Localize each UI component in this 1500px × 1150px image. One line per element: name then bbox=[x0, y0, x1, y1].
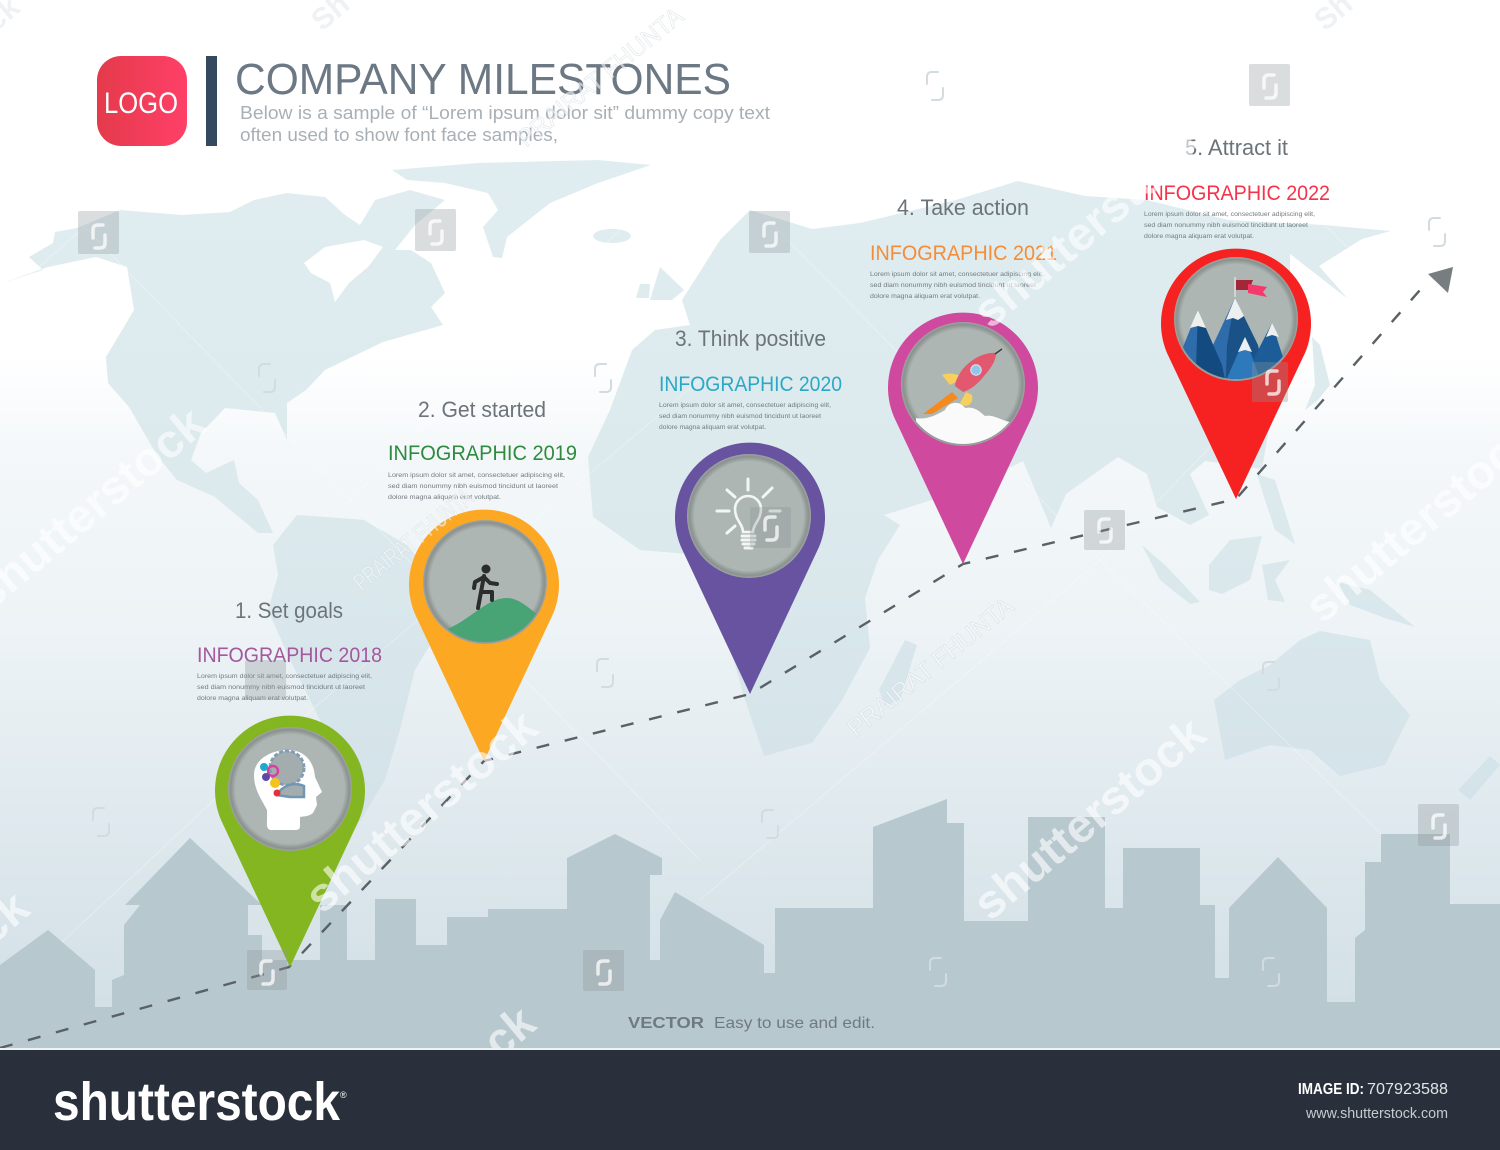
milestone 3 text: 3. Think positive bbox=[675, 326, 826, 351]
pin 3: purple with bulb icon bbox=[675, 443, 825, 694]
milestone 5 text: sed diam nonummy nibh euismod tincidunt ut laoreet bbox=[1144, 222, 1308, 229]
pin 1: green with head and gears icon bbox=[215, 716, 365, 967]
image id: IMAGE ID: bbox=[1298, 1081, 1364, 1098]
milestone 1 text: INFOGRAPHIC 2018 bbox=[197, 644, 382, 667]
footer logo: shutterstock bbox=[53, 1072, 341, 1132]
milestone 4 text: sed diam nonummy nibh euismod tincidunt ut laoreet bbox=[870, 282, 1036, 289]
registered mark: ® bbox=[340, 1090, 347, 1100]
contributor watermarks: PRAIRAT FHUNTA bbox=[842, 592, 1019, 743]
pin 5: red with mountains icon bbox=[1161, 249, 1311, 499]
milestone 4 text: 4. Take action bbox=[897, 195, 1029, 220]
milestone 4 text bbox=[870, 195, 1057, 300]
top edge watermark fragments bbox=[0, 0, 1359, 37]
image id bbox=[1298, 1081, 1448, 1122]
pin 2: orange with walker icon bbox=[409, 510, 559, 761]
icon: flag bbox=[1235, 277, 1267, 297]
milestone 4 text: INFOGRAPHIC 2021 bbox=[870, 242, 1057, 265]
subtitle bbox=[240, 103, 770, 145]
vector caption: VECTOR bbox=[628, 1015, 705, 1032]
milestone 4 text: Lorem ipsum dolor sit amet, consectetuer adipiscing elit, bbox=[870, 271, 1044, 278]
pin 4: magenta with rocket icon bbox=[888, 313, 1038, 564]
header divider bar bbox=[206, 56, 217, 146]
contributor watermarks: PRAIRAT FHUNTA bbox=[512, 2, 689, 153]
milestone 2 text: 2. Get started bbox=[418, 397, 546, 422]
watermark squares bbox=[78, 64, 1459, 991]
milestone 2 text: dolore magna aliquam erat volutpat. bbox=[388, 494, 501, 501]
milestone 4 text: dolore magna aliquam erat volutpat. bbox=[870, 293, 980, 300]
company logo badge bbox=[97, 56, 187, 146]
milestone 3 text: dolore magna aliquam erat volutpat. bbox=[659, 424, 766, 431]
milestone 3 text: INFOGRAPHIC 2020 bbox=[659, 373, 842, 396]
footer band bbox=[0, 1048, 1500, 1150]
icon: cloud bbox=[916, 402, 1010, 444]
title: COMPANY MILESTONES bbox=[235, 55, 731, 104]
shutterstock watermarks: shutterstock bbox=[294, 698, 547, 923]
milestone 1 text: sed diam nonummy nibh euismod tincidunt ut laoreet bbox=[197, 684, 365, 691]
shutterstock watermarks: ck bbox=[472, 994, 545, 1068]
watermark logos bbox=[93, 75, 1445, 984]
milestone 3 text bbox=[659, 326, 842, 431]
milestone 2 text: INFOGRAPHIC 2019 bbox=[388, 442, 577, 465]
contributor watermarks bbox=[348, 2, 1019, 743]
milestone 5 text: Lorem ipsum dolor sit amet, consectetuer adipiscing elit, bbox=[1144, 211, 1315, 218]
milestone 5 text bbox=[1144, 135, 1330, 240]
shutterstock watermarks: shutterstock bbox=[962, 705, 1215, 930]
icon: light bulb bbox=[717, 479, 780, 548]
milestone 1 text: 1. Set goals bbox=[235, 598, 343, 623]
milestone 1 text: Lorem ipsum dolor sit amet, consectetuer adipiscing elit, bbox=[197, 673, 372, 680]
milestone 1 text: dolore magna aliquam erat volutpat. bbox=[197, 695, 308, 702]
icon: head with gears bbox=[254, 750, 322, 830]
milestone 5 text: dolore magna aliquam erat volutpat. bbox=[1144, 233, 1254, 240]
milestone 5 text: INFOGRAPHIC 2022 bbox=[1144, 182, 1330, 205]
vector caption bbox=[628, 1015, 875, 1032]
milestone 1 text bbox=[197, 598, 382, 702]
milestone 2 text bbox=[388, 397, 577, 501]
milestone 2 text: sed diam nonummy nibh euismod tincidunt ut laoreet bbox=[388, 483, 558, 490]
icon: hill bbox=[448, 598, 536, 642]
icon: mountains with flag bbox=[1183, 298, 1283, 379]
milestone 3 text: Lorem ipsum dolor sit amet, consectetuer adipiscing elit, bbox=[659, 402, 831, 409]
city skyline bbox=[0, 799, 1500, 1050]
dashed growth line with arrow bbox=[0, 267, 1453, 1048]
image id: 707923588 bbox=[1367, 1081, 1448, 1098]
image id: www.shutterstock.com bbox=[1305, 1105, 1448, 1122]
subtitle: often used to show font face samples, bbox=[240, 125, 558, 145]
subtitle: Below is a sample of “Lorem ipsum dolor sit” dummy copy text bbox=[240, 103, 770, 123]
contributor watermarks: PRAIRAT FHUNTA bbox=[348, 484, 479, 597]
small outline watermark logos bbox=[93, 72, 1445, 986]
vector caption: Easy to use and edit. bbox=[714, 1015, 875, 1032]
icon: rocket bbox=[923, 349, 1002, 414]
milestone 2 text: Lorem ipsum dolor sit amet, consectetuer adipiscing elit, bbox=[388, 472, 565, 479]
company logo badge: LOGO bbox=[104, 87, 178, 120]
world map bbox=[2, 160, 1500, 830]
milestone 5 text: 5. Attract it bbox=[1185, 135, 1288, 160]
milestone 3 text: sed diam nonummy nibh euismod tincidunt ut laoreet bbox=[659, 413, 821, 420]
icon: walking person bbox=[474, 564, 497, 608]
shutterstock watermarks: shutterstock bbox=[962, 113, 1215, 338]
